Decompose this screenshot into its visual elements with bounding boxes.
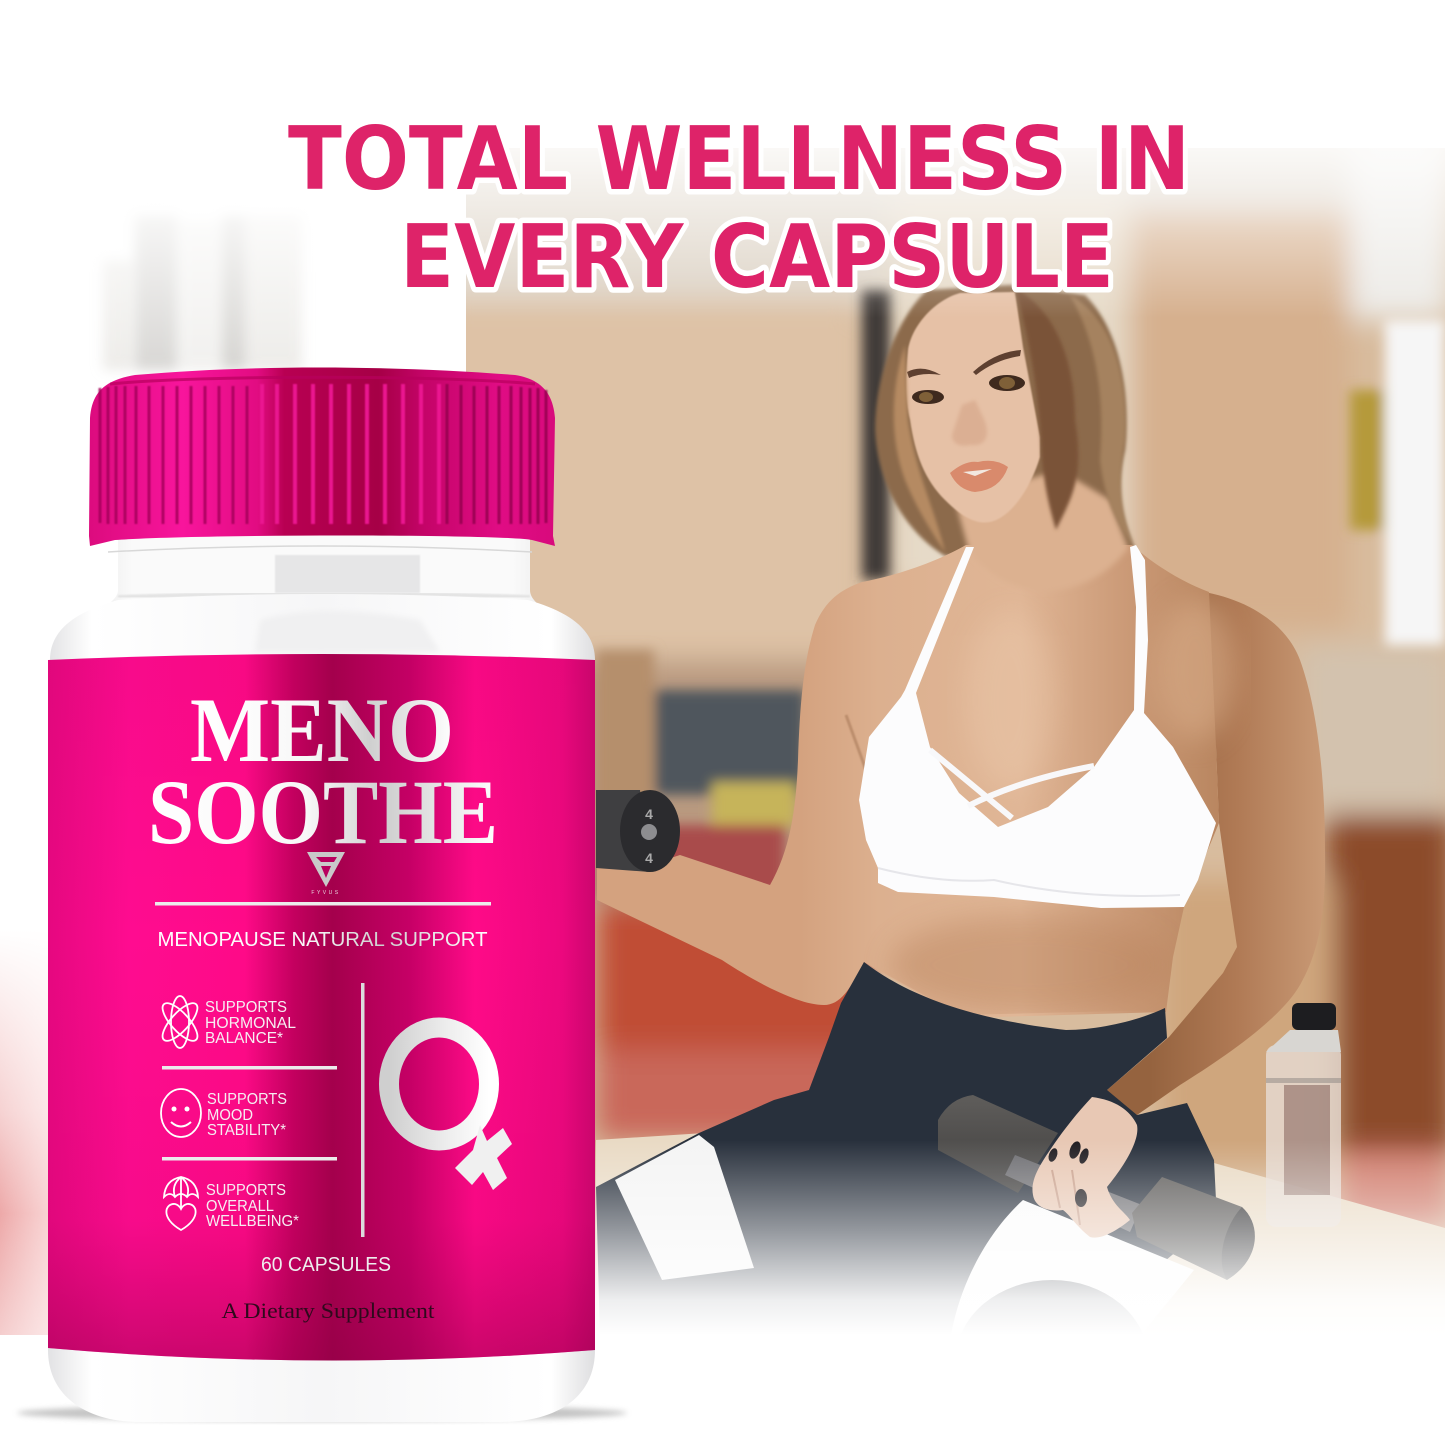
- benefit divider 2: [162, 1157, 337, 1160]
- knee dark patch: [972, 1280, 1132, 1316]
- hand with dark nails: [1032, 1097, 1137, 1238]
- benefit: hormonal balance: HORMONAL: [205, 1015, 296, 1032]
- tagline: MENOPAUSE NATURAL SUPPORT: [158, 929, 488, 951]
- vertical divider: [361, 983, 364, 1237]
- hair back: [875, 285, 1135, 556]
- leggings: [596, 962, 1216, 1340]
- lower dumbbell: [938, 1095, 1255, 1280]
- benefit: mood stability: STABILITY*: [207, 1122, 286, 1139]
- benefit divider 1: [162, 1066, 337, 1070]
- legging white panel: [615, 1135, 754, 1280]
- benefit: mood stability: [161, 1089, 287, 1139]
- torso and right arm: [597, 545, 1219, 1018]
- raised dumbbell: 4: [645, 806, 653, 822]
- brand logo: [307, 852, 345, 896]
- title: EVERY CAPSULE: [400, 206, 1114, 308]
- body shading: [846, 600, 1235, 1015]
- water bottle: [1266, 1003, 1341, 1227]
- her left arm holding lower dumbbell: [1092, 590, 1325, 1115]
- shoulder shading: [255, 611, 440, 652]
- bench surface: [596, 1133, 1445, 1277]
- neck: [955, 470, 1128, 591]
- benefit: hormonal balance: [157, 996, 296, 1048]
- benefit: overall wellbeing: WELLBEING*: [206, 1213, 299, 1230]
- dietary supplement line: A Dietary Supplement: [222, 1298, 434, 1323]
- brand logo: FYVUS: [311, 890, 341, 896]
- title: TOTAL WELLNESS IN: [288, 108, 1190, 210]
- benefit: mood stability: SUPPORTS: [207, 1091, 287, 1108]
- background photo: gym interior: [440, 130, 1445, 1335]
- brand name: [148, 679, 498, 863]
- benefit: hormonal balance: BALANCE*: [205, 1030, 283, 1047]
- bottle shadow: [17, 1405, 627, 1421]
- icon: female symbol: [389, 1028, 512, 1190]
- knee white panel: [955, 1200, 1194, 1318]
- benefit: hormonal balance: SUPPORTS: [205, 999, 287, 1016]
- sports bra: [859, 545, 1216, 908]
- hair front strands: [894, 288, 1133, 552]
- brand name: SOOTHE: [148, 761, 498, 863]
- neck details: [108, 546, 532, 597]
- faint background columns behind bottle: [103, 215, 302, 370]
- raised dumbbell: [596, 790, 680, 872]
- label: [48, 654, 595, 1361]
- divider: [155, 902, 491, 906]
- bottle cap: [89, 367, 555, 546]
- benefit: overall wellbeing: SUPPORTS: [206, 1182, 286, 1199]
- facial features: [907, 350, 1025, 492]
- benefit: mood stability: MOOD: [207, 1107, 253, 1124]
- brand name: MENO: [190, 679, 454, 781]
- raised dumbbell: 4: [645, 850, 653, 866]
- benefit: overall wellbeing: OVERALL: [206, 1198, 274, 1215]
- product bottle: [17, 367, 627, 1422]
- woman exercising with dumbbells: [596, 285, 1325, 1440]
- bottle body: [48, 594, 595, 1422]
- benefit: overall wellbeing: [164, 1177, 299, 1230]
- title: [288, 108, 1190, 308]
- face: [906, 292, 1040, 523]
- bottle neck: [85, 535, 560, 622]
- capsule count: 60 CAPSULES: [261, 1254, 391, 1276]
